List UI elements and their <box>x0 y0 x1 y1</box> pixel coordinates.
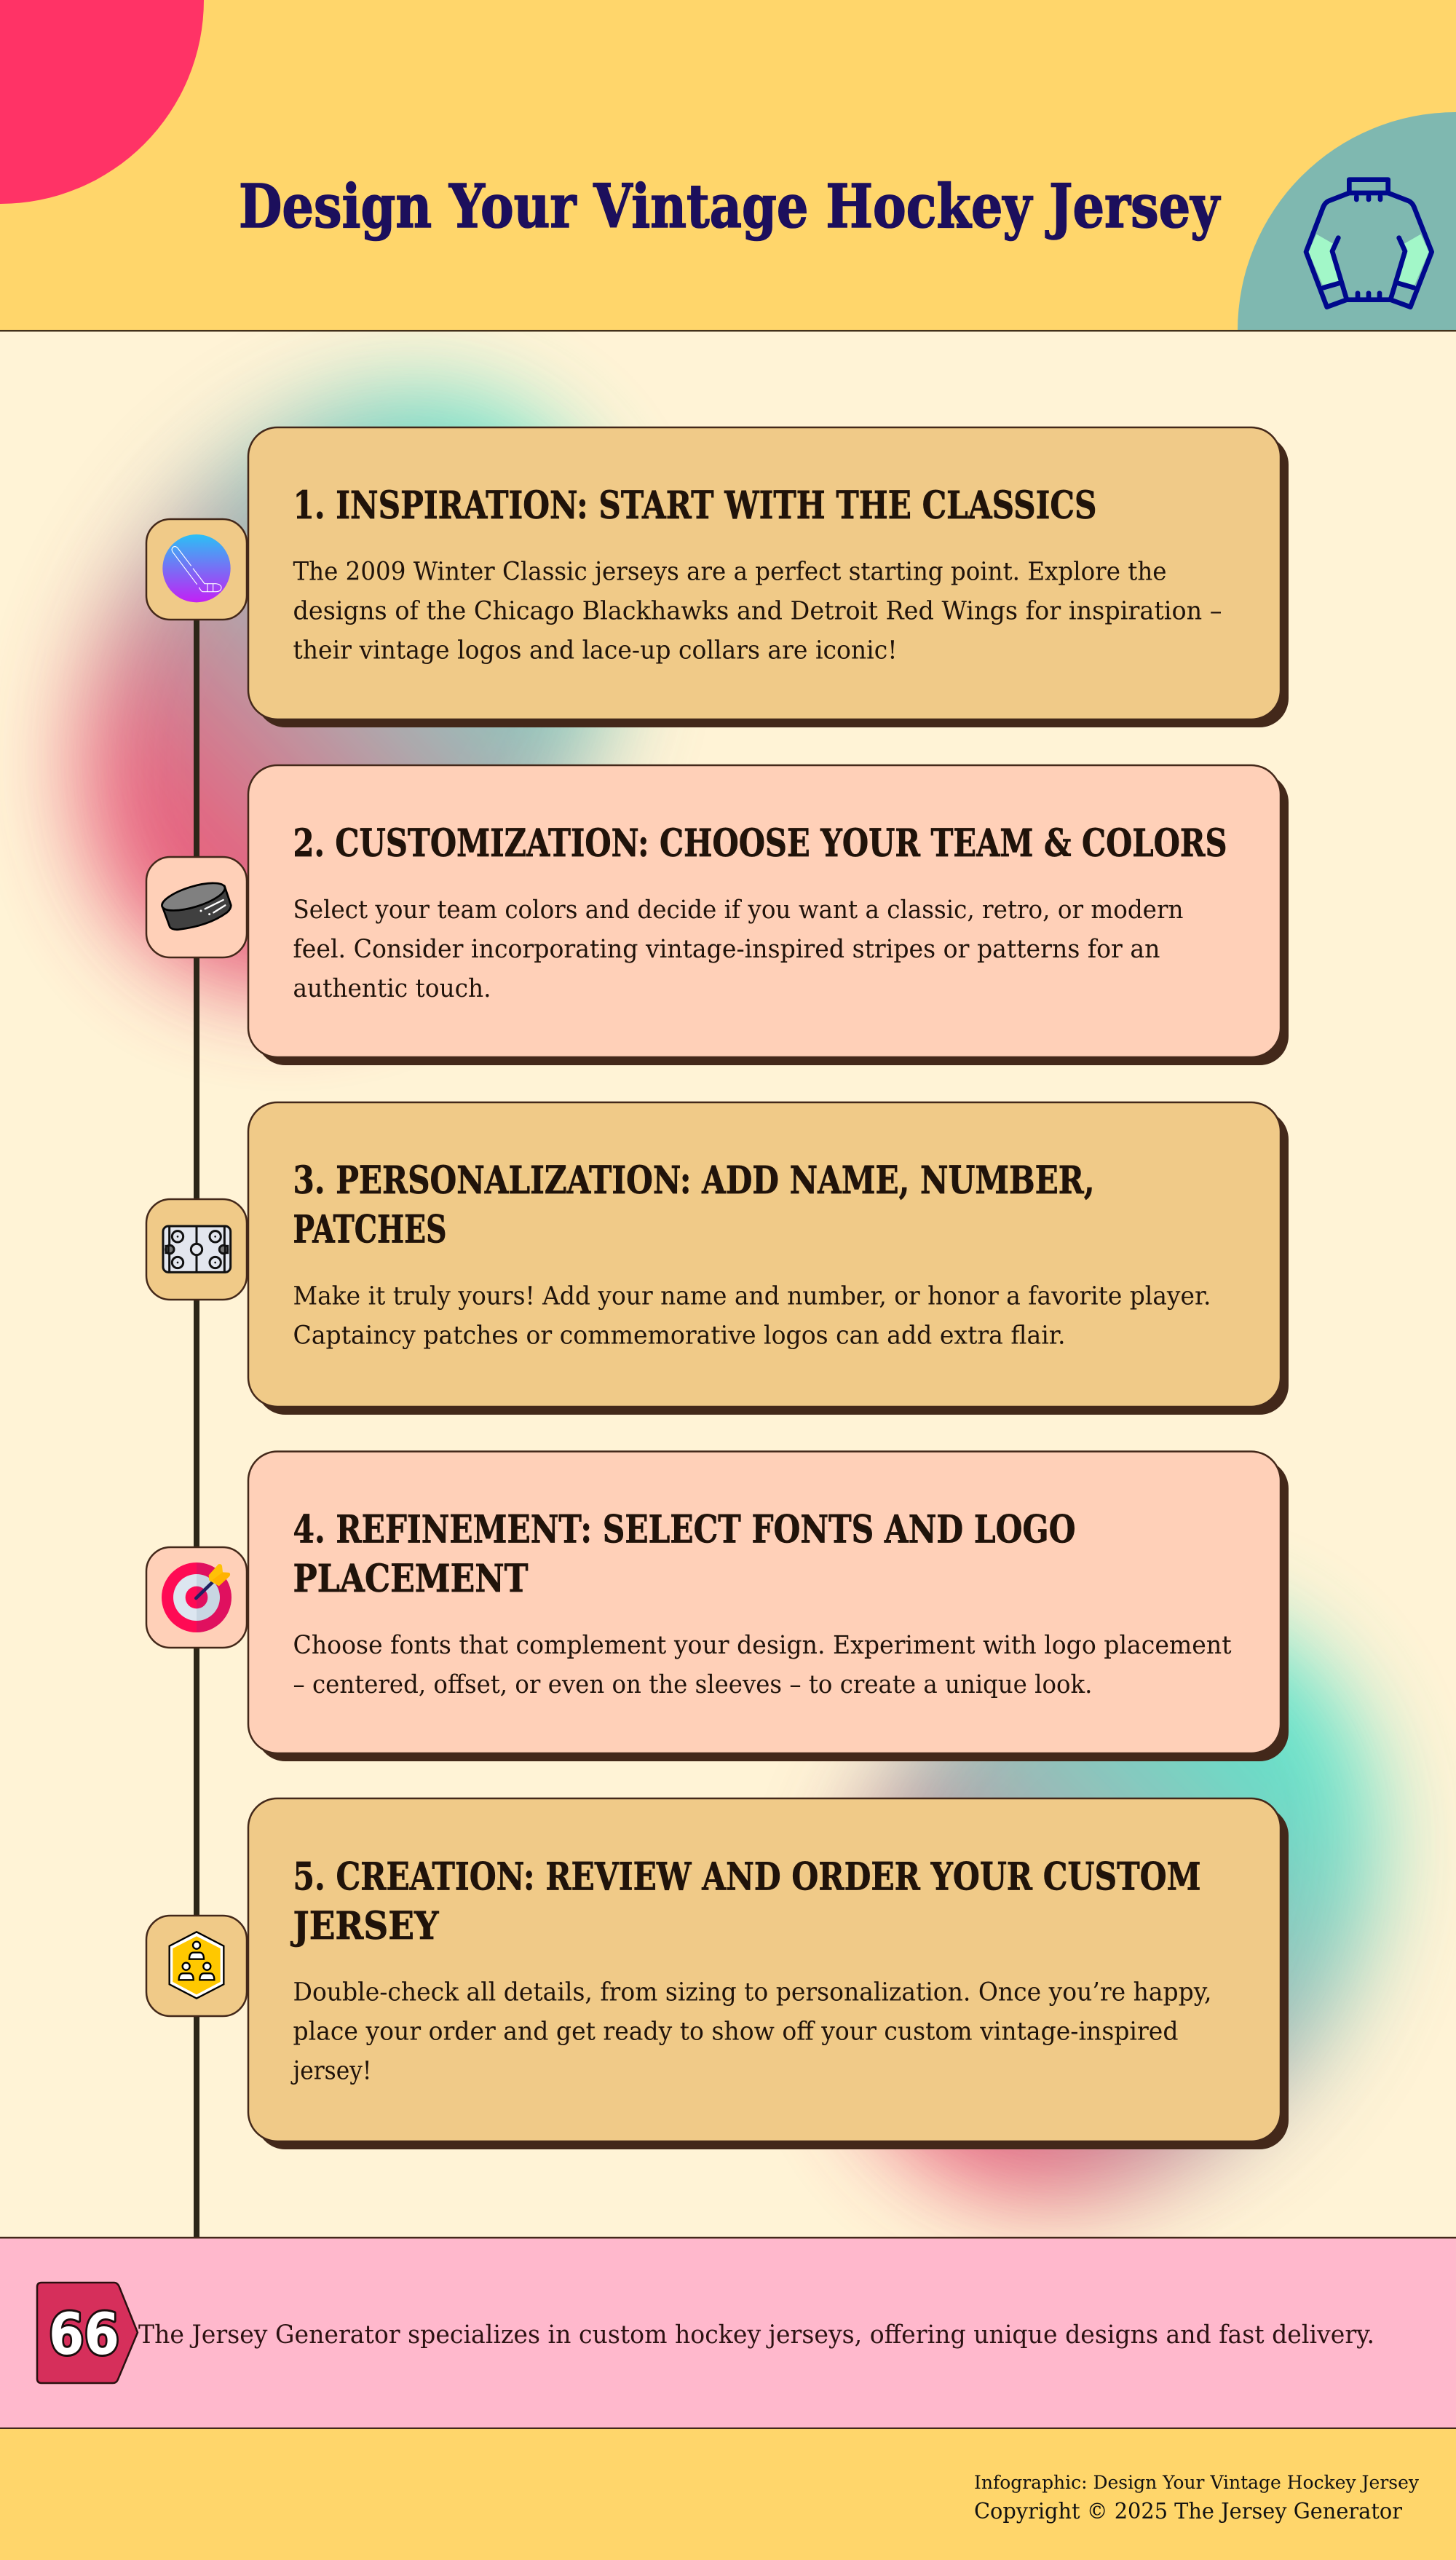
icon box 2: puck <box>146 857 247 957</box>
card 3: personalization <box>248 1102 1289 1415</box>
badge: 66: 66 <box>49 2302 119 2368</box>
heading 3: 3. PERSONALIZATION: ADD NAME, NUMBER, <box>293 1158 1095 1203</box>
body 4: – centered, offset, or even on the sleeves – to create a unique look. <box>293 1670 1092 1699</box>
card 4: refinement <box>248 1452 1289 1761</box>
icon: jersey <box>1306 180 1432 307</box>
icon box 5: team hexagon <box>146 1916 247 2016</box>
body 1: their vintage logos and lace-up collars are iconic! <box>293 636 897 665</box>
body 5: place your order and get ready to show off your custom vintage-inspired <box>293 2017 1178 2046</box>
icon box 4: target <box>146 1547 247 1648</box>
badge: 66 <box>37 2283 138 2383</box>
icon box 1: hockey stick <box>146 519 247 620</box>
body 4: Choose fonts that complement your design. Experiment with logo placement <box>293 1631 1232 1660</box>
body 5: jersey! <box>290 2056 371 2085</box>
quote band <box>0 2237 1456 2429</box>
heading 3: PATCHES <box>293 1207 447 1252</box>
card 2: customization <box>248 765 1289 1065</box>
timeline line <box>194 620 199 2237</box>
body 2: feel. Consider incorporating vintage-inspired stripes or patterns for an <box>293 935 1160 964</box>
body 3 <box>293 1281 1211 1350</box>
body 5 <box>290 1978 1212 2085</box>
body 3: Captaincy patches or commemorative logos can add extra flair. <box>293 1321 1066 1350</box>
body 5: Double-check all details, from sizing to personalization. Once you’re happy, <box>293 1978 1211 2007</box>
heading 4: 4. REFINEMENT: SELECT FONTS AND LOGO <box>293 1507 1076 1552</box>
footer copyright: Copyright © 2025 The Jersey Generator <box>974 2499 1403 2524</box>
decorative blurred blobs <box>81 392 1377 2200</box>
heading 3 <box>293 1158 1095 1252</box>
footer credit: Infographic: Design Your Vintage Hockey Jersey <box>974 2472 1420 2493</box>
header band <box>0 0 1456 332</box>
body 1: The 2009 Winter Classic jerseys are a perfect starting point. Explore the <box>293 558 1166 587</box>
body 2: authentic touch. <box>293 974 491 1003</box>
heading 5: 5. CREATION: REVIEW AND ORDER YOUR CUSTOM <box>293 1855 1201 1899</box>
heading 4 <box>293 1507 1076 1601</box>
body 3: Make it truly yours! Add your name and number, or honor a favorite player. <box>293 1281 1211 1311</box>
body 1 <box>293 558 1222 665</box>
heading 4: PLACEMENT <box>293 1557 529 1601</box>
card 5: creation <box>248 1798 1289 2149</box>
heading 5 <box>290 1855 1201 1948</box>
heading 2: 2. CUSTOMIZATION: CHOOSE YOUR TEAM & COLORS <box>293 821 1227 866</box>
body 2 <box>293 896 1184 1003</box>
quote text: The Jersey Generator specializes in custom hockey jerseys, offering unique designs and fast delivery. <box>138 2320 1374 2350</box>
body 1: designs of the Chicago Blackhawks and Detroit Red Wings for inspiration – <box>293 597 1222 626</box>
heading 1: 1. INSPIRATION: START WITH THE CLASSICS <box>293 483 1096 528</box>
card 1: inspiration <box>248 427 1289 727</box>
title: Design Your Vintage Hockey Jersey <box>239 172 1221 242</box>
body 2: Select your team colors and decide if you want a classic, retro, or modern <box>293 896 1184 925</box>
footer <box>0 2429 1456 2560</box>
body 4 <box>293 1631 1232 1699</box>
heading 5: JERSEY <box>290 1904 439 1948</box>
icon box 3: rink <box>146 1199 247 1300</box>
